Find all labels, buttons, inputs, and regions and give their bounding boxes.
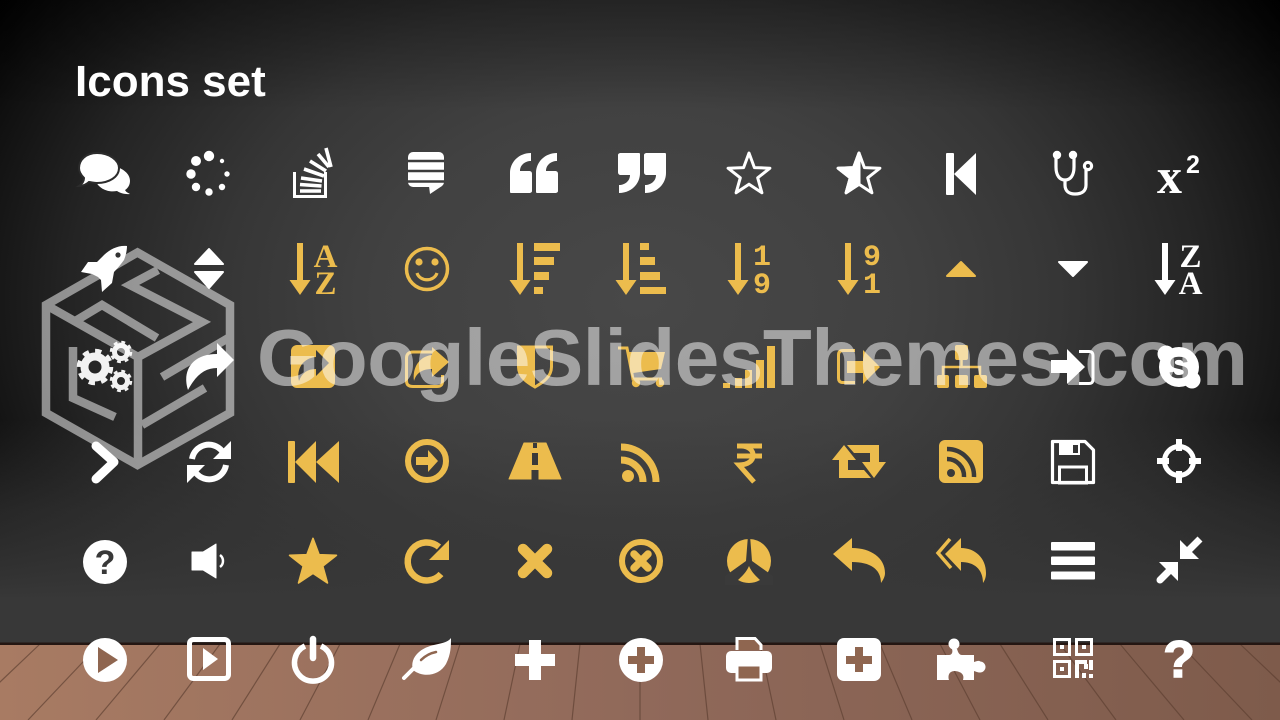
- icon: share arrow: [186, 343, 234, 390]
- icon: sort numeric ascending: 9: [753, 269, 771, 303]
- icon: share square: [291, 345, 335, 388]
- icon: sort amount descending: [510, 243, 560, 295]
- icon: refresh: [187, 441, 231, 483]
- icon: times: [523, 549, 547, 573]
- icon: quote right: [618, 153, 666, 193]
- icon: shield: [518, 347, 552, 387]
- icon: crosshairs: [1157, 439, 1201, 483]
- icon: smile: [406, 248, 448, 290]
- icon: reply all: [938, 538, 986, 583]
- icon: sort numeric ascending: 1: [753, 241, 771, 275]
- icon: rebel peace: [725, 538, 773, 585]
- icon: road: [509, 443, 561, 480]
- icon: sort alpha descending: [1154, 239, 1203, 302]
- icon: superscript: [1157, 148, 1200, 204]
- icon: spinner: [186, 151, 230, 196]
- icon: list bubble: [408, 152, 444, 194]
- icon: volume: [192, 544, 223, 578]
- icon: chevron right: [96, 446, 114, 479]
- icon: rss square: [939, 440, 983, 483]
- icon: retweet: [832, 445, 886, 478]
- icon: star outline: [728, 153, 770, 193]
- icon: question mark: ?: [1163, 631, 1195, 689]
- icon: power off: [294, 639, 332, 681]
- icon: play circle: [83, 638, 127, 682]
- icon: question circle: ?: [95, 544, 115, 582]
- icon: play square: [190, 640, 228, 678]
- icon: star solid: [290, 538, 336, 583]
- icon: quote left: [510, 153, 558, 193]
- icon: bars menu: [1051, 542, 1095, 580]
- icon: qr code: [1054, 640, 1093, 678]
- icon: skype: S: [1169, 350, 1189, 385]
- icon: rss: [621, 447, 656, 482]
- icon: signal bars: [723, 346, 775, 388]
- icon: floppy disk: [1052, 442, 1094, 483]
- icon: sort caret: [195, 249, 223, 288]
- icon: fast backward: [288, 441, 339, 483]
- icon: rocket: [81, 246, 127, 292]
- icon: share square outline: [406, 347, 449, 386]
- icon: stack overflow: [294, 148, 331, 196]
- icon: comments: [79, 153, 130, 194]
- icon: sitemap: [937, 345, 987, 388]
- icon: sign in: [1051, 349, 1093, 384]
- icon: sort alpha descending: Z: [1179, 239, 1202, 275]
- icon: sort numeric ascending: [728, 241, 771, 303]
- icon: rotate right: [408, 540, 449, 580]
- icon: leaf: [404, 638, 451, 678]
- icon: compress: [1159, 539, 1200, 581]
- icon: arrow circle right: [408, 442, 446, 480]
- icon: gears: [80, 342, 130, 390]
- watermark: site name: GoogleSlidesThemes.com: [257, 313, 1248, 402]
- icon: step backward: [946, 153, 976, 195]
- background: wooden floor: [0, 642, 1280, 720]
- icon: stethoscope: [1054, 152, 1092, 194]
- icon: sort alpha ascending: [290, 239, 338, 302]
- icon: sort alpha ascending: A: [314, 239, 338, 275]
- icon: question circle: [83, 540, 127, 584]
- icon: sort alpha ascending: Z: [314, 266, 337, 302]
- icon: reply: [833, 538, 885, 583]
- icon: star half: [838, 153, 880, 193]
- icon: sort numeric descending: [838, 241, 881, 303]
- icon: skype: [1158, 346, 1200, 388]
- icon: print: [726, 638, 772, 680]
- icon: sort numeric descending: 1: [863, 269, 881, 303]
- icon: caret down: [1059, 262, 1087, 276]
- icon: sort alpha descending: A: [1179, 266, 1203, 302]
- icon: sort amount ascending: [616, 243, 666, 295]
- watermark: cube logo: [46, 252, 230, 465]
- icon: plus: [515, 640, 555, 680]
- icon: superscript: 2: [1186, 151, 1200, 179]
- icon: times circle: [622, 542, 660, 580]
- icon: sign out: [838, 350, 880, 384]
- icon: plus square: [837, 638, 881, 681]
- title: Icons set: [75, 57, 266, 106]
- icon: puzzle piece: [937, 638, 986, 680]
- icon: caret up: [947, 262, 975, 276]
- icon: cart: [618, 348, 665, 387]
- icon: rupee: [737, 446, 762, 482]
- icon: superscript: x: [1157, 148, 1182, 204]
- icon: plus circle: [619, 638, 663, 682]
- icon: sort numeric descending: 9: [863, 241, 881, 275]
